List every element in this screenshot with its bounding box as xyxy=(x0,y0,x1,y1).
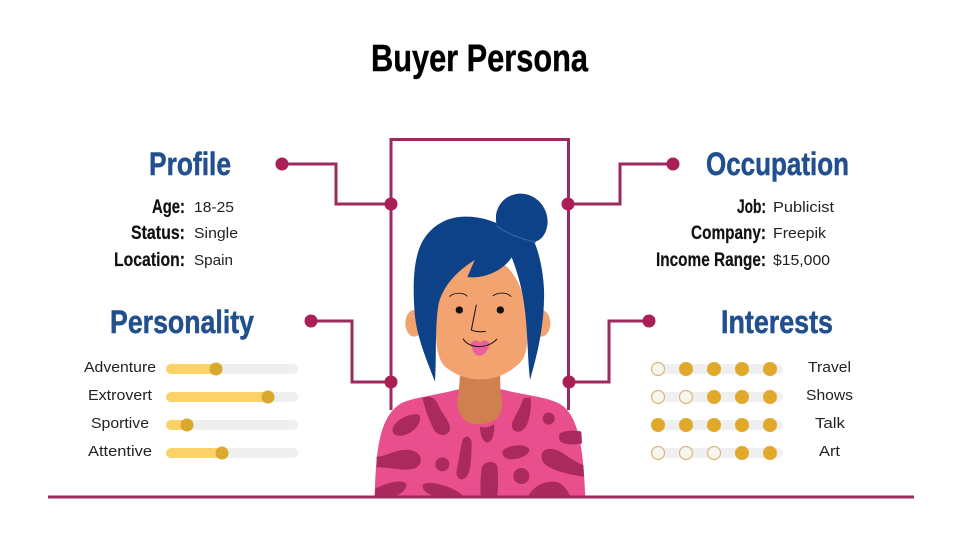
heading: profile: Profile xyxy=(149,146,231,182)
panel: personality xyxy=(84,304,298,460)
panel: occupation: Income Range: xyxy=(656,250,766,271)
baseline rule xyxy=(48,496,914,498)
hair xyxy=(414,217,544,382)
panel: occupation xyxy=(656,146,849,271)
hair bun xyxy=(496,194,548,242)
panel: occupation: Freepik xyxy=(773,225,827,242)
panel: interests: Talk xyxy=(815,415,846,432)
panel: profile: Spain xyxy=(194,252,233,269)
mouth line xyxy=(463,339,497,347)
panel: occupation: Company: xyxy=(691,223,766,244)
panel: personality: Sportive xyxy=(91,415,149,432)
panel: interests xyxy=(651,304,853,460)
panel: interests: Shows xyxy=(806,387,853,404)
eyebrows xyxy=(449,293,511,297)
lips xyxy=(471,340,490,356)
panel: personality: Adventure xyxy=(84,359,156,376)
nose xyxy=(471,305,486,332)
face xyxy=(436,255,528,379)
panel: occupation: Publicist xyxy=(773,199,835,216)
panel: profile: 18-25 xyxy=(194,199,234,216)
heading: interests: Interests xyxy=(721,304,833,340)
panel: occupation: $15,000 xyxy=(773,252,830,269)
shirt spots xyxy=(375,397,584,496)
panel: profile xyxy=(114,146,238,271)
hair tie xyxy=(497,226,536,242)
panel: personality: Extrovert xyxy=(88,387,153,404)
panel: interests: Travel xyxy=(808,359,851,376)
panel: profile: Status: xyxy=(131,223,185,244)
neck xyxy=(457,375,502,424)
title: Buyer Persona xyxy=(371,38,589,80)
connector frame xyxy=(276,140,680,410)
illustration: woman with blue hair xyxy=(375,194,585,497)
eyes xyxy=(456,306,504,314)
panel: personality: Attentive xyxy=(88,443,152,460)
panel: profile: Single xyxy=(194,225,238,242)
shirt xyxy=(375,389,585,497)
panel: interests: Art xyxy=(819,443,841,460)
panel: profile: Age: xyxy=(152,197,185,218)
ears xyxy=(405,310,550,337)
panel: occupation: Job: xyxy=(737,197,766,218)
heading: personality: Personality xyxy=(110,304,254,340)
panel: profile: Location: xyxy=(114,250,185,271)
heading: occupation: Occupation xyxy=(706,146,849,182)
